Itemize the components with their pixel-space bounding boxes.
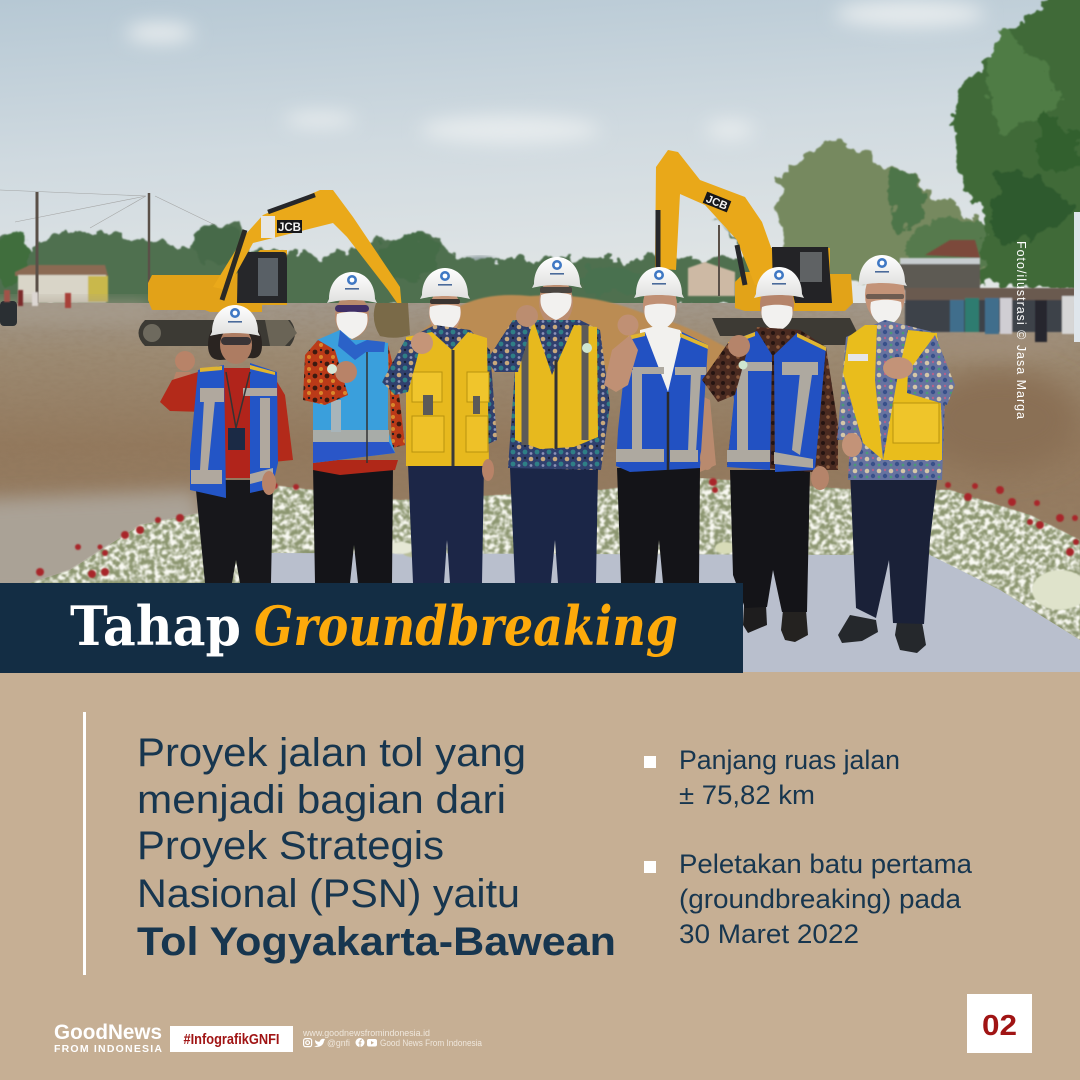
batik shirt xyxy=(837,320,945,480)
vest xyxy=(727,331,826,472)
excavator body xyxy=(148,250,287,312)
bucket xyxy=(374,303,410,338)
helmet xyxy=(327,272,377,303)
vest xyxy=(406,332,489,466)
white plate on boom xyxy=(261,216,275,238)
car at left xyxy=(0,301,17,326)
shirt xyxy=(222,368,254,478)
hashtag box xyxy=(170,1026,293,1052)
logo: GoodNews from Indonesia xyxy=(54,1021,162,1055)
pants xyxy=(313,466,393,583)
person 5: blue vest xyxy=(604,267,716,583)
collar xyxy=(338,330,385,360)
footer contact information: www.goodnewsfromindonesia.id xyxy=(302,1028,430,1038)
shoes xyxy=(743,605,767,633)
left arm xyxy=(604,335,638,392)
fist xyxy=(516,305,538,327)
excavator tracks xyxy=(138,320,297,346)
right arm xyxy=(700,395,716,472)
main statement xyxy=(137,731,616,964)
person 3: yellow vest xyxy=(382,268,497,583)
neck and face xyxy=(335,294,369,338)
right sleeve xyxy=(907,335,955,405)
crowd of onlookers xyxy=(905,288,1075,342)
hand xyxy=(700,446,714,470)
excavator body xyxy=(735,248,853,311)
helmet xyxy=(210,305,260,336)
vertical rule xyxy=(83,712,86,975)
white shirt xyxy=(640,325,690,392)
left sleeve xyxy=(382,340,422,395)
person 4: yellow vest xyxy=(487,257,610,583)
icon: twitter xyxy=(314,1039,325,1047)
clouds xyxy=(126,1,985,144)
person 2: light blue vest xyxy=(303,272,405,583)
utility poles xyxy=(0,190,719,325)
mask xyxy=(429,305,461,332)
person 6: blue vest xyxy=(702,267,838,642)
main statement: Proyek Strategis xyxy=(137,824,444,868)
right sleeve xyxy=(388,345,405,448)
excavator left xyxy=(138,190,410,346)
helmet xyxy=(857,255,907,286)
boom xyxy=(655,150,773,290)
roadside people at left xyxy=(4,290,71,308)
logo: GoodNews from Indonesia: GoodNews xyxy=(54,1021,162,1044)
face xyxy=(760,281,794,329)
vest xyxy=(515,322,598,449)
fact: road length xyxy=(644,745,900,810)
fact: groundbreaking date: 30 Maret 2022 xyxy=(679,919,859,949)
vest xyxy=(190,365,226,498)
icon: youtube xyxy=(367,1039,377,1046)
icon: instagram xyxy=(304,1039,312,1047)
footer contact information: @gnfi xyxy=(327,1038,350,1048)
helmet xyxy=(754,267,804,298)
sunglasses xyxy=(221,337,251,345)
face xyxy=(539,278,573,326)
main statement: Nasional (PSN) yaitu xyxy=(137,872,520,916)
vest xyxy=(616,332,708,472)
sunglasses xyxy=(335,305,369,312)
hand xyxy=(482,459,494,481)
fact: groundbreaking date xyxy=(644,849,973,949)
JCB label: JCB xyxy=(704,193,729,213)
photo: groundbreaking ceremony xyxy=(0,0,1080,672)
shoes xyxy=(838,615,878,643)
hydraulic cylinder xyxy=(656,210,660,270)
icon: facebook xyxy=(356,1038,364,1047)
mask xyxy=(761,305,793,332)
pants xyxy=(510,468,598,583)
fact: groundbreaking date: (groundbreaking) pada xyxy=(679,884,962,914)
pants xyxy=(617,468,700,583)
footer contact information xyxy=(302,1028,482,1048)
banner at right edge xyxy=(1074,212,1080,342)
yellow trim xyxy=(200,365,275,375)
face xyxy=(220,326,252,364)
zip xyxy=(366,352,368,463)
face xyxy=(643,281,677,329)
distant hill xyxy=(458,256,500,262)
distant treeline xyxy=(0,222,790,308)
trees at right xyxy=(778,0,1080,290)
excavator right xyxy=(655,150,857,345)
fact: groundbreaking date: Peletakan batu pertama xyxy=(679,849,973,879)
flower bed xyxy=(30,478,1080,640)
page number: 02 xyxy=(982,1010,1017,1042)
dirt mound xyxy=(405,295,730,372)
mask xyxy=(870,300,902,327)
vest xyxy=(313,330,395,463)
title banner xyxy=(0,583,743,673)
left sleeve xyxy=(303,340,348,405)
shirt hem xyxy=(313,460,398,475)
boom hydraulic cylinder xyxy=(268,195,315,212)
title highlighted word: Groundbreaking xyxy=(254,594,678,658)
main statement: menjadi bagian dari xyxy=(137,778,506,822)
hand on chest xyxy=(883,357,913,379)
fist xyxy=(411,332,433,354)
fist xyxy=(335,361,357,383)
batik shirt xyxy=(508,320,610,470)
boom xyxy=(213,190,402,310)
helmet xyxy=(634,267,684,298)
mask xyxy=(336,312,368,339)
hair xyxy=(208,320,262,360)
footer contact information: Good News From Indonesia xyxy=(380,1038,482,1048)
hand xyxy=(811,466,829,490)
left arm and fist xyxy=(166,372,200,402)
pants xyxy=(850,470,938,624)
excavator tracks xyxy=(712,318,857,345)
ground xyxy=(0,303,1080,588)
key tag xyxy=(848,354,868,361)
hand xyxy=(262,471,276,495)
left sleeve xyxy=(702,343,748,402)
red flowers xyxy=(36,478,1079,578)
helmet xyxy=(532,257,582,288)
houses in the background xyxy=(15,240,980,303)
batik shirt xyxy=(405,325,497,445)
vest xyxy=(843,325,883,460)
face xyxy=(865,268,905,322)
right sleeve xyxy=(273,380,293,462)
person 7: yellow vest xyxy=(837,255,955,653)
logo: GoodNews from Indonesia: FROM INDONESIA xyxy=(54,1043,162,1055)
helmet xyxy=(420,268,470,299)
cab xyxy=(772,247,832,303)
main statement: Proyek jalan tol yang xyxy=(137,731,526,775)
flower edge over carpet xyxy=(386,541,1080,610)
title word: Tahap xyxy=(70,594,241,658)
mask xyxy=(644,304,676,331)
main statement: Tol Yogyakarta-Bawean xyxy=(137,920,616,964)
bullet xyxy=(644,756,656,768)
pants xyxy=(408,464,484,583)
person 1: woman in blue vest xyxy=(160,305,293,583)
carpet xyxy=(267,553,1080,672)
bullet xyxy=(644,861,656,873)
fist xyxy=(728,335,750,357)
hashtag box: #InfografikGNFI xyxy=(184,1032,280,1048)
JCB label: JCB xyxy=(278,222,301,234)
photo credit: Foto/ilustrasi © Jasa Marga xyxy=(1014,241,1028,419)
left sleeve xyxy=(487,320,532,372)
batik shirt xyxy=(727,327,838,472)
sky xyxy=(0,0,1080,320)
vest reflective stripes xyxy=(191,388,277,484)
pants xyxy=(195,480,273,583)
fact: road length: Panjang ruas jalan xyxy=(679,745,900,775)
fact: road length: ± 75,82 km xyxy=(679,780,815,810)
ID card xyxy=(226,372,250,450)
pants xyxy=(730,470,810,612)
cab xyxy=(237,252,287,303)
page number xyxy=(967,994,1032,1053)
left hand xyxy=(842,433,862,457)
ground light patches xyxy=(0,304,1080,600)
face xyxy=(429,289,461,335)
mask xyxy=(540,293,572,320)
